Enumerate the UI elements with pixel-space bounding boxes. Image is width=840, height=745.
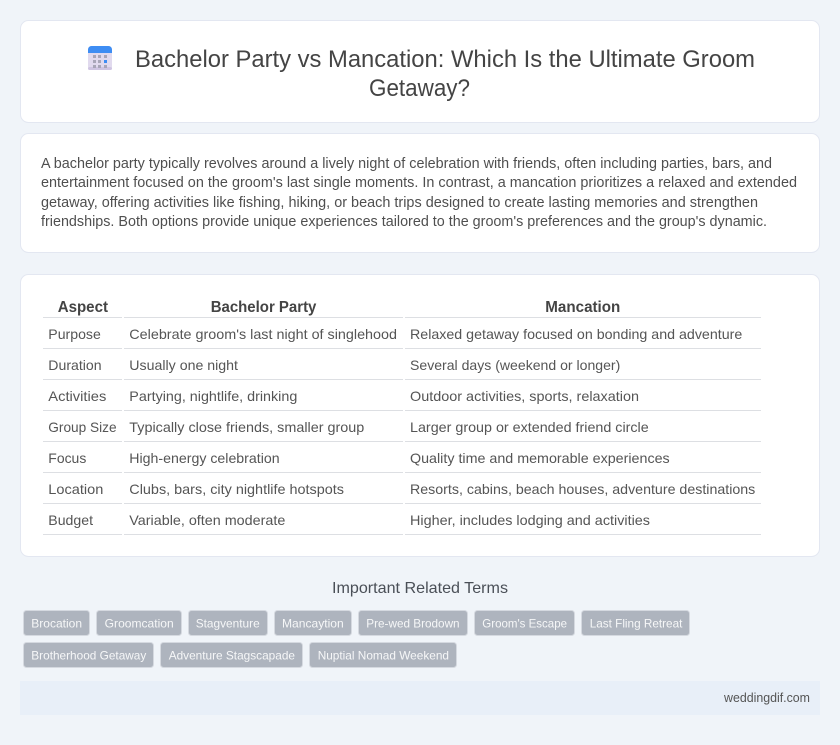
row: location (48, 481, 755, 497)
tag: Brotherhood Getaway (24, 642, 154, 668)
row: purpose: Purpose (48, 326, 101, 342)
row: location: Clubs, bars, city nightlife hotspots (129, 481, 344, 497)
panel: introduction text (20, 134, 820, 252)
icon: calendar (88, 46, 112, 70)
tag: Last Fling Retreat: Last Fling Retreat (590, 616, 683, 630)
row: group size (48, 419, 649, 435)
footer: weddingdif.com (723, 691, 810, 705)
row: budget: Budget (48, 512, 93, 528)
tag: Brocation: Brocation (31, 616, 82, 630)
tag: Stagventure: Stagventure (196, 616, 260, 630)
row: purpose: Celebrate groom's last night of singlehood (129, 326, 397, 342)
tag: Pre-wed Brodown: Pre-wed Brodown (366, 616, 460, 630)
row: activities (48, 388, 639, 404)
row: focus (48, 450, 670, 466)
row: duration: Duration (48, 357, 102, 373)
panel: introduction text: getaway, offering activities like fishing, hiking, or beach trips designed to create lasting memories and strengthen (41, 194, 758, 211)
footer (20, 681, 820, 715)
table header: Aspect (58, 299, 109, 316)
tag: Adventure Stagscapade: Adventure Stagscapade (169, 648, 295, 662)
row: purpose: Relaxed getaway focused on bonding and adventure (410, 326, 743, 342)
row: location: Resorts, cabins, beach houses, adventure destinations (410, 481, 755, 497)
row: activities: Activities (48, 388, 106, 404)
heading: important related terms: Important Related Terms (332, 580, 508, 597)
tag: Mancaytion (274, 610, 352, 636)
row: duration: Several days (weekend or longer) (410, 357, 620, 373)
row: duration: Usually one night (129, 357, 238, 373)
table header (58, 299, 620, 316)
title: Getaway? (369, 75, 470, 102)
panel: comparison table (20, 274, 820, 556)
row: focus: High-energy celebration (129, 450, 280, 466)
table header: Mancation (545, 299, 620, 316)
row: group size: Group Size (48, 419, 117, 435)
panel: introduction text: friendships. Both options provide unique experiences tailored to the groom's preferences and the group's dynamic. (41, 213, 767, 230)
row: duration (48, 357, 620, 373)
title: Bachelor Party vs Mancation: Which Is the Ultimate Groom (135, 46, 755, 73)
tag: Nuptial Nomad Weekend (310, 642, 456, 668)
row: purpose (48, 326, 743, 342)
row: focus: Focus (48, 450, 86, 466)
tag: Last Fling Retreat (582, 610, 690, 636)
panel: title card (20, 20, 820, 122)
row: budget (48, 512, 650, 528)
panel: introduction text: A bachelor party typically revolves around a lively night of celebration with friends, often including parties, bars, and (41, 155, 772, 172)
related term tags (24, 610, 690, 668)
tag: Groomcation (96, 610, 182, 636)
row: focus: Quality time and memorable experiences (410, 450, 670, 466)
row: budget: Higher, includes lodging and activities (410, 512, 650, 528)
row: budget: Variable, often moderate (129, 512, 286, 528)
tag: Stagventure (188, 610, 268, 636)
tag: Adventure Stagscapade (160, 642, 302, 668)
table header: Bachelor Party (211, 299, 316, 316)
title (135, 46, 755, 102)
tag: Nuptial Nomad Weekend: Nuptial Nomad Weekend (318, 648, 449, 662)
row: activities: Partying, nightlife, drinking (129, 388, 297, 404)
row: activities: Outdoor activities, sports, relaxation (410, 388, 639, 404)
tag: Brotherhood Getaway: Brotherhood Getaway (31, 648, 146, 662)
tag: Brocation (24, 610, 90, 636)
row: location: Location (48, 481, 103, 497)
tag: Groom's Escape: Groom's Escape (482, 616, 567, 630)
row: group size: Larger group or extended friend circle (410, 419, 649, 435)
tag: Mancaytion: Mancaytion (282, 616, 344, 630)
tag: Pre-wed Brodown (358, 610, 468, 636)
panel: introduction text: entertainment focused on the groom's last single moments. In contrast, a mancation prioritizes a relaxed and extended (41, 174, 797, 191)
tag: Groom's Escape (474, 610, 574, 636)
tag: Groomcation: Groomcation (105, 616, 174, 630)
row: group size: Typically close friends, smaller group (129, 419, 365, 435)
